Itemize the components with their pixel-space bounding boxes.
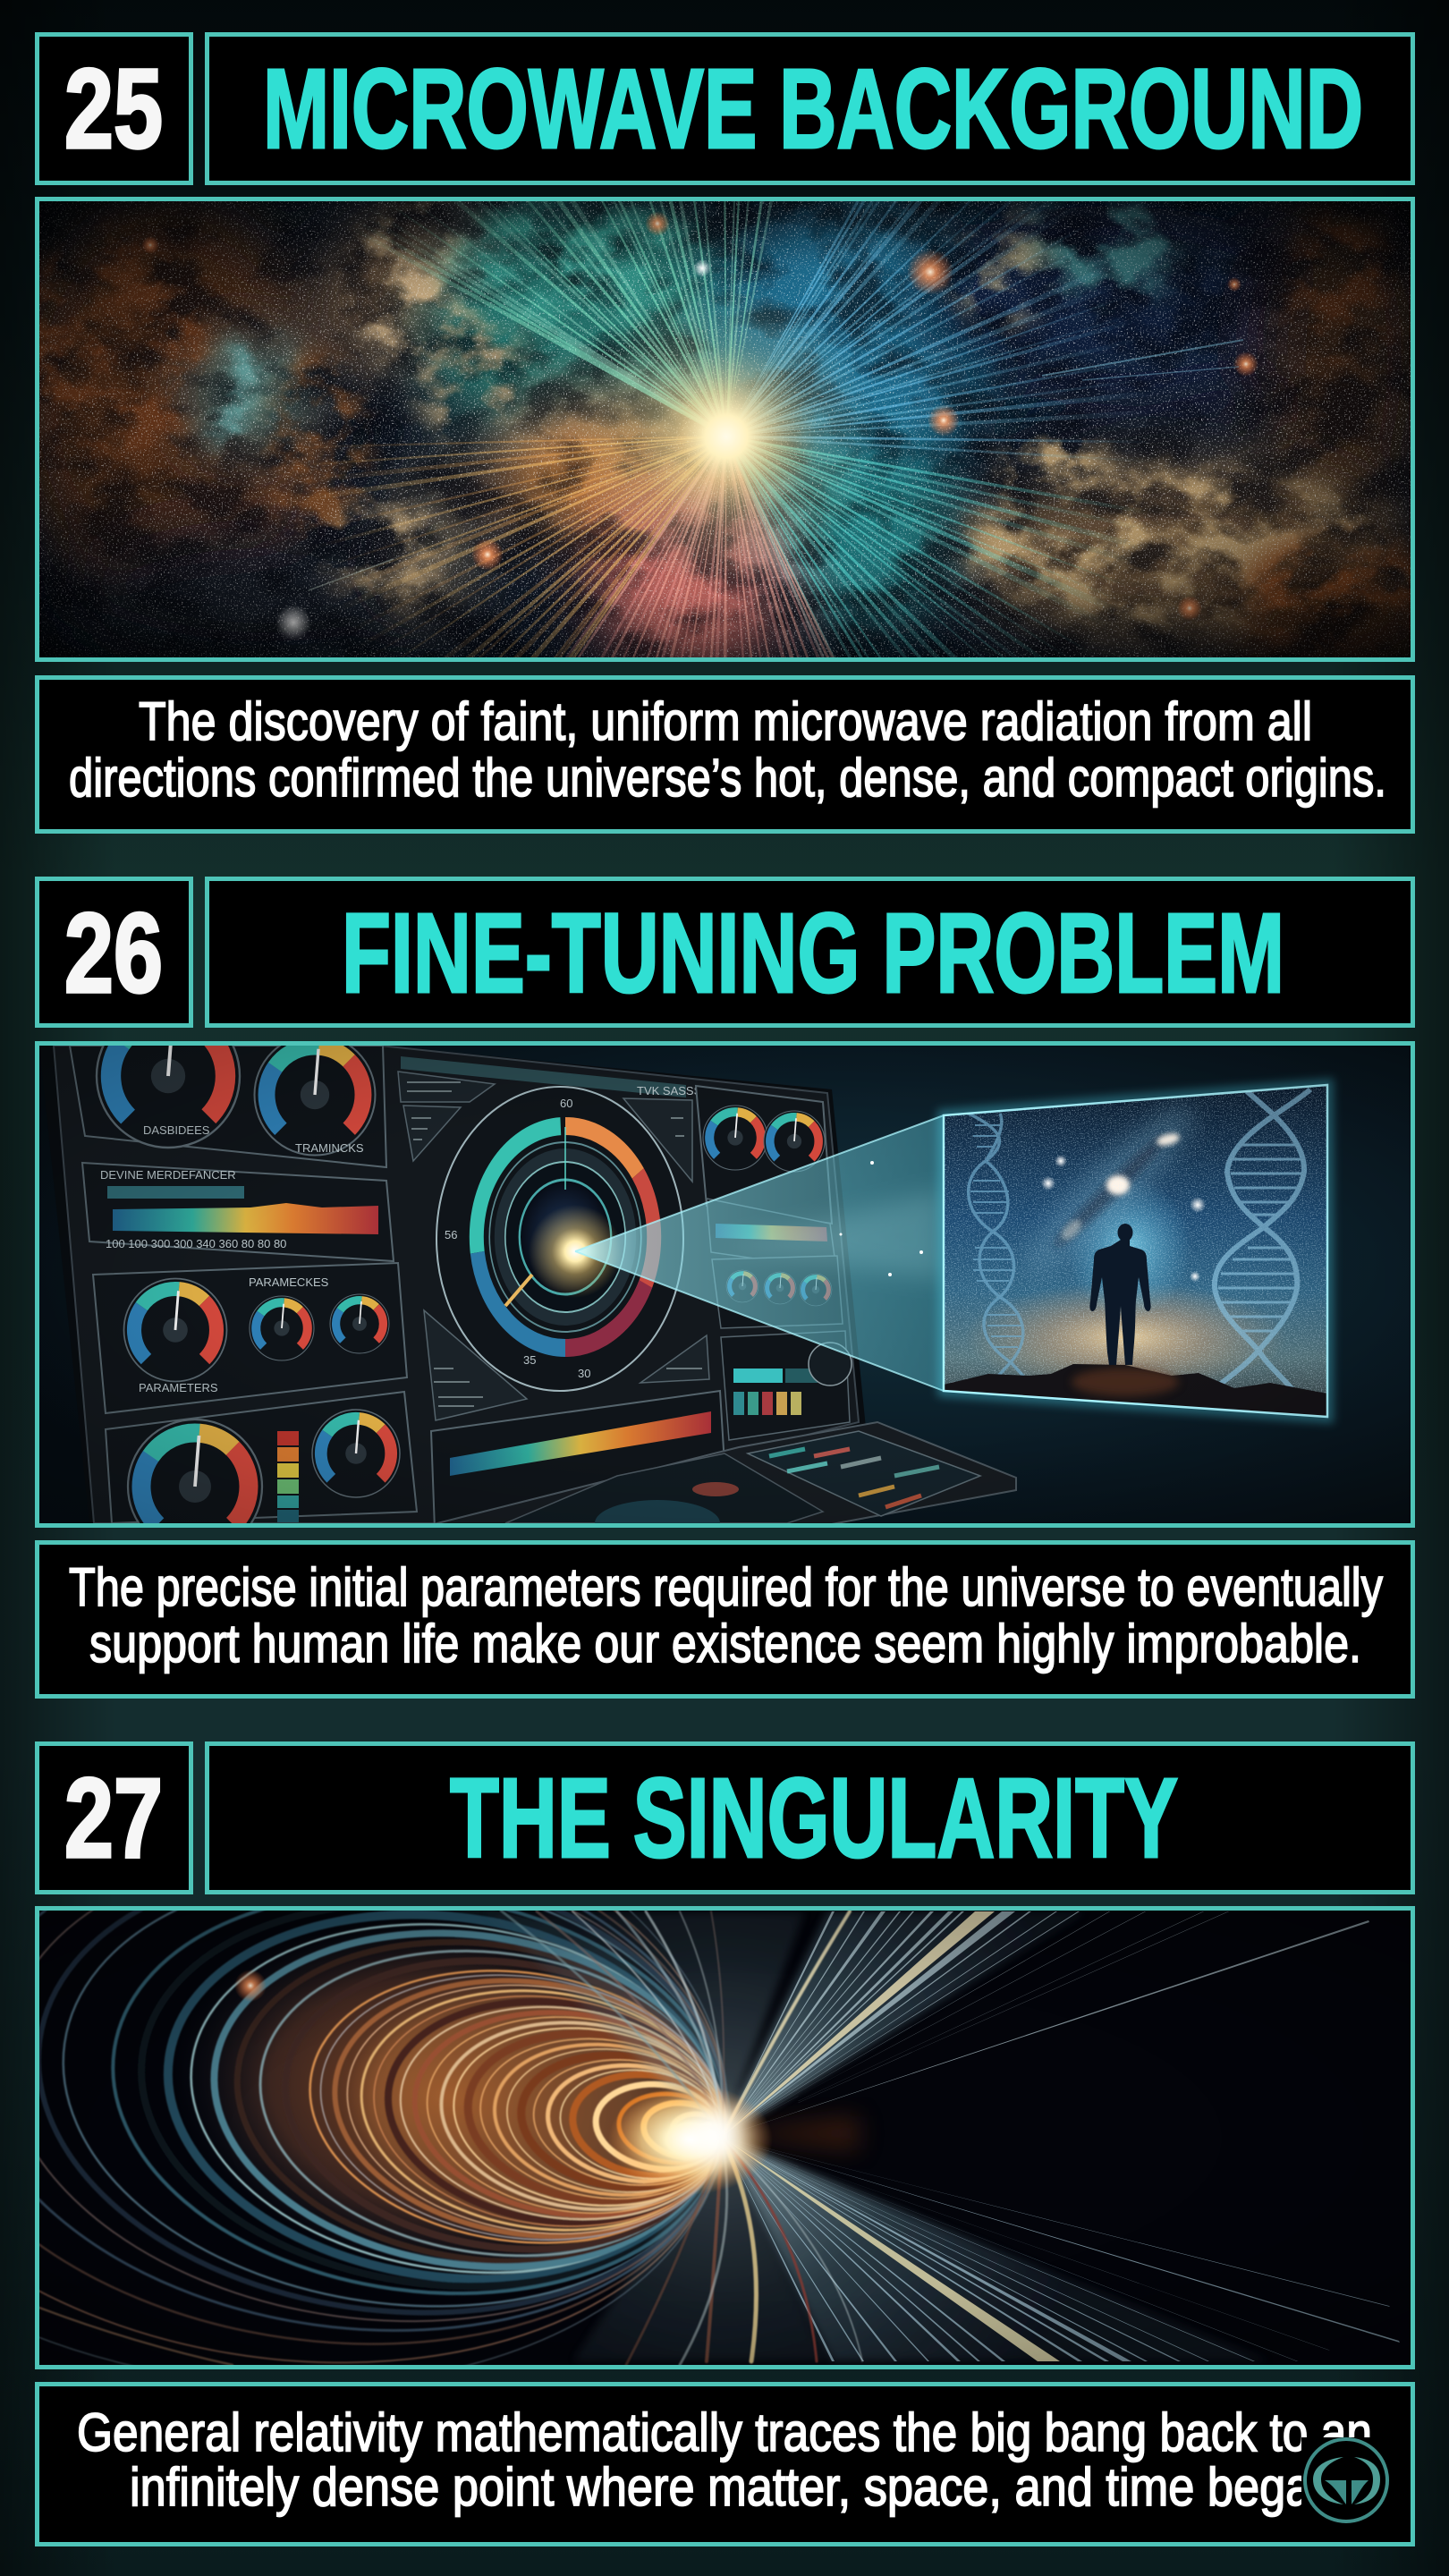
light rays: [318, 201, 1138, 657]
central dial: [436, 1082, 689, 1392]
number badge 27: 27: [64, 1755, 163, 1881]
caption 26: [38, 1542, 1413, 1696]
section 27: the singularity: [0, 1690, 1412, 2544]
panel: spectrum bar: DEVINE MERDEFANCER: [100, 1168, 236, 1182]
panel: parameters: PARAMETERS: [139, 1381, 218, 1394]
projected cosmic screen: [944, 1085, 1328, 1422]
number badge 26: 26: [64, 890, 163, 1016]
illustration: spiral collapsing to a singularity: [0, 1690, 1412, 2446]
central glow: [592, 298, 865, 576]
panel: top gauges: TRAMINCKS: [295, 1141, 364, 1155]
central dial: 35: [523, 1353, 536, 1367]
singularity core: [234, 1970, 773, 2195]
panel: lower gauges: [105, 1390, 419, 1523]
spiral rings: [0, 1690, 769, 2446]
right instrument column: [696, 1086, 852, 1440]
caption 25: [38, 678, 1413, 832]
panel: parameters: PARAMECKES: [249, 1275, 329, 1289]
section 25: microwave background: [35, 32, 1415, 834]
heading: the singularity: [208, 1744, 1413, 1893]
keyboard deck: [434, 1422, 1016, 1546]
central dial: 30: [578, 1367, 590, 1380]
lower ray fan: [722, 2137, 1400, 2361]
soft ray fans: [483, 1911, 1270, 2361]
header strip and side readouts: TVK SASSS: [637, 1084, 702, 1097]
dark dust lanes: [39, 201, 1411, 657]
number badge 27: [38, 1744, 191, 1893]
projection beam: [575, 1115, 944, 1391]
dashboard screen: [53, 1046, 866, 1523]
logo badge: [1301, 2437, 1402, 2527]
upper ray fan: [722, 1911, 1369, 2137]
heading: the singularity: THE SINGULARITY: [450, 1755, 1178, 1881]
warm glow right of core: [722, 2115, 859, 2151]
panel: top gauges: DASBIDEES: [143, 1123, 210, 1137]
DNA helix left: [969, 1114, 1029, 1382]
number badge 25: [38, 34, 191, 182]
bright stars: [141, 211, 1258, 640]
header strip and side readouts: [398, 1056, 709, 1420]
panel: spectrum bar: [82, 1163, 394, 1261]
human silhouette: [1089, 1224, 1151, 1365]
number badge 25: 25: [64, 46, 163, 172]
section 26: fine-tuning problem: [38, 878, 1413, 1696]
bottom spectrum panel: [431, 1391, 726, 1530]
panel: parameters: [93, 1263, 407, 1413]
illustration: control dashboard projecting a cosmos: [35, 1041, 1415, 1528]
DNA helix right: [1208, 1089, 1310, 1395]
illustration: cosmic starburst nebula: [35, 197, 1415, 662]
milky way: [1011, 1091, 1208, 1288]
curved streams: [39, 1911, 862, 2365]
panel: spectrum bar: 100 100 300 300 340 360 80 80 80: [106, 1237, 286, 1250]
hills: [944, 1364, 1327, 1422]
central dial: 56: [445, 1228, 457, 1241]
caption 27: [38, 2385, 1413, 2544]
panel: top gauges: [69, 1046, 387, 1168]
central dial: 60: [560, 1097, 572, 1110]
